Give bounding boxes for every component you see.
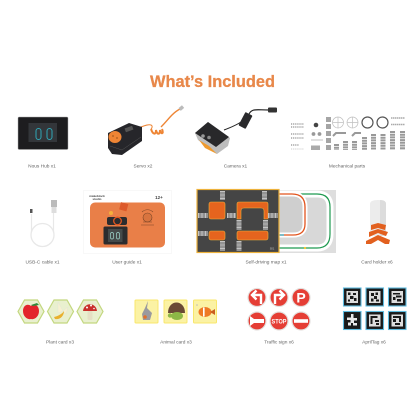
- icon: Traffic sign: [248, 288, 310, 330]
- icon: Card holder: [366, 200, 390, 244]
- icon: Traffic sign: STOP: [272, 318, 287, 326]
- label: USB-C cable x1: [25, 260, 60, 266]
- icon: User guide: makeblock: [89, 194, 105, 198]
- label: Animal card x3: [160, 340, 192, 346]
- label: Traffic sign x6: [264, 340, 294, 346]
- item: User guide: [84, 190, 172, 266]
- icon: Self-driving map: [197, 0, 336, 253]
- label: AprilTag x6: [362, 340, 386, 346]
- label: Servo x2: [134, 164, 153, 170]
- item: Card holder: [361, 200, 393, 266]
- icon: USB-C cable: [30, 200, 57, 246]
- icon: Mechanical parts: [291, 117, 405, 150]
- item: Camera: [195, 108, 277, 170]
- item: AprilTag: [344, 288, 406, 346]
- icon: Plant card: [18, 300, 103, 323]
- icon: Animal card: [135, 300, 216, 323]
- label: Self-driving map x1: [245, 260, 287, 266]
- item: Traffic sign: [248, 288, 310, 346]
- icon: User guide: studio: [92, 197, 102, 201]
- label: User guide x1: [112, 260, 142, 266]
- icon: AprilTag: [344, 288, 406, 330]
- icon: Traffic sign: P: [296, 290, 306, 306]
- item: USB-C cable: [25, 200, 60, 266]
- icon: Nous Hub: [18, 117, 68, 150]
- label: Mechanical parts: [329, 164, 366, 170]
- label: Plant card x3: [46, 340, 74, 346]
- item: Self-driving map: [197, 0, 336, 266]
- label: Camera x1: [224, 164, 248, 170]
- icon: User guide: 12+: [155, 195, 163, 200]
- item: Servo: [108, 105, 184, 170]
- icon: Self-driving map: S01: [270, 248, 275, 250]
- item: Plant card: [18, 300, 103, 346]
- item: Mechanical parts: [291, 117, 405, 170]
- icon: User guide: [84, 190, 172, 254]
- item: Animal card: [135, 300, 216, 346]
- item: Nous Hub: [18, 117, 68, 170]
- label: Nous Hub x1: [28, 164, 56, 170]
- title: What’s Included: [150, 72, 275, 91]
- label: Card holder x6: [361, 260, 393, 266]
- icon: Camera: [195, 108, 277, 154]
- icon: Servo: [108, 105, 184, 155]
